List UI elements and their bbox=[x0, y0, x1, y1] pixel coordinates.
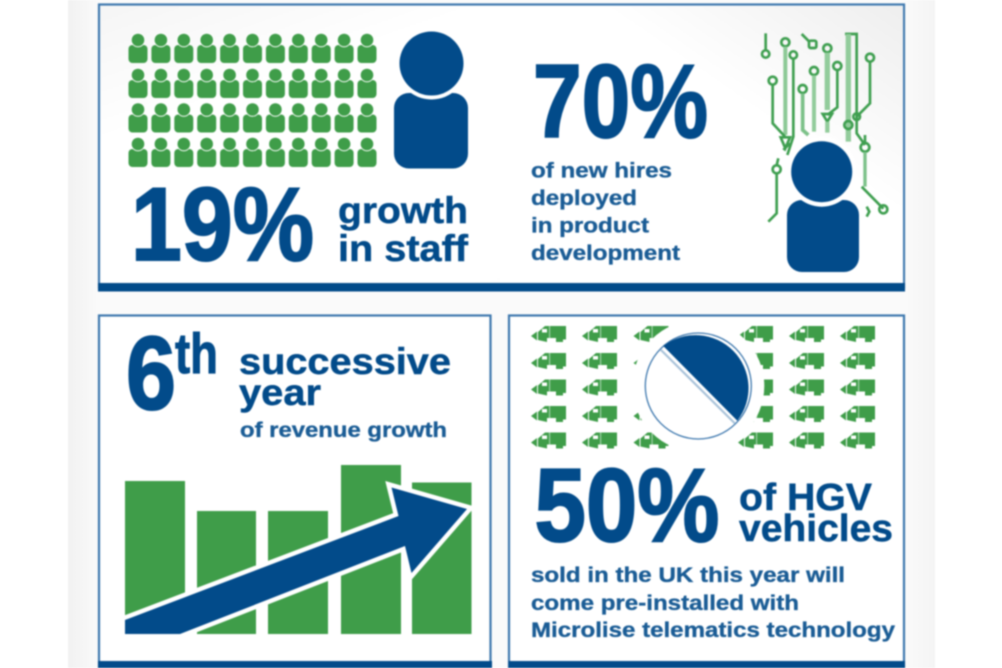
label: new hires description: in product bbox=[531, 214, 649, 238]
icon: large blue person bbox=[394, 28, 468, 168]
text: telematics description: Microlise telematics technology bbox=[531, 619, 895, 642]
panel: HGV vehicles bbox=[508, 316, 905, 668]
stat: 6th: th bbox=[175, 322, 218, 386]
text: telematics description bbox=[531, 564, 895, 642]
label: growth in staff: in staff bbox=[338, 228, 469, 269]
label: new hires description: development bbox=[531, 242, 680, 265]
icon grid: small green people bbox=[128, 33, 376, 167]
heading: successive year: successive bbox=[239, 341, 451, 382]
stat: 50%: 50% bbox=[534, 448, 720, 564]
stat: 6th: 6 bbox=[126, 316, 176, 432]
panel: staff growth and new hires bbox=[98, 4, 905, 292]
heading: successive year: year bbox=[239, 372, 321, 413]
text: telematics description: sold in the UK this year will bbox=[531, 564, 845, 587]
label: of revenue growth: of revenue growth bbox=[240, 419, 447, 442]
text: telematics description: come pre-installed with bbox=[531, 592, 799, 615]
bar chart bbox=[125, 465, 472, 634]
label: growth in staff bbox=[338, 190, 469, 269]
label: of HGV vehicles: of HGV bbox=[739, 477, 873, 519]
label: new hires description: of new hires bbox=[531, 160, 672, 182]
icon: circuit lines bbox=[762, 33, 887, 222]
icon grid: green trucks bbox=[531, 326, 875, 448]
pie chart: 50 percent bbox=[632, 320, 764, 452]
label: new hires description bbox=[531, 160, 680, 265]
stat: 19%: 19% bbox=[131, 167, 314, 283]
label: new hires description: deployed bbox=[531, 187, 637, 210]
stat: 6th bbox=[126, 316, 218, 432]
arrow: upward trend bbox=[125, 488, 467, 634]
icon: large blue person with circuits bbox=[787, 137, 859, 272]
label: growth in staff: growth bbox=[338, 190, 468, 231]
stat: 70%: 70% bbox=[533, 44, 708, 160]
label: of HGV vehicles: vehicles bbox=[739, 508, 893, 550]
panel: revenue growth bbox=[98, 316, 492, 668]
label: of HGV vehicles bbox=[739, 477, 893, 550]
heading: successive year bbox=[239, 341, 451, 413]
